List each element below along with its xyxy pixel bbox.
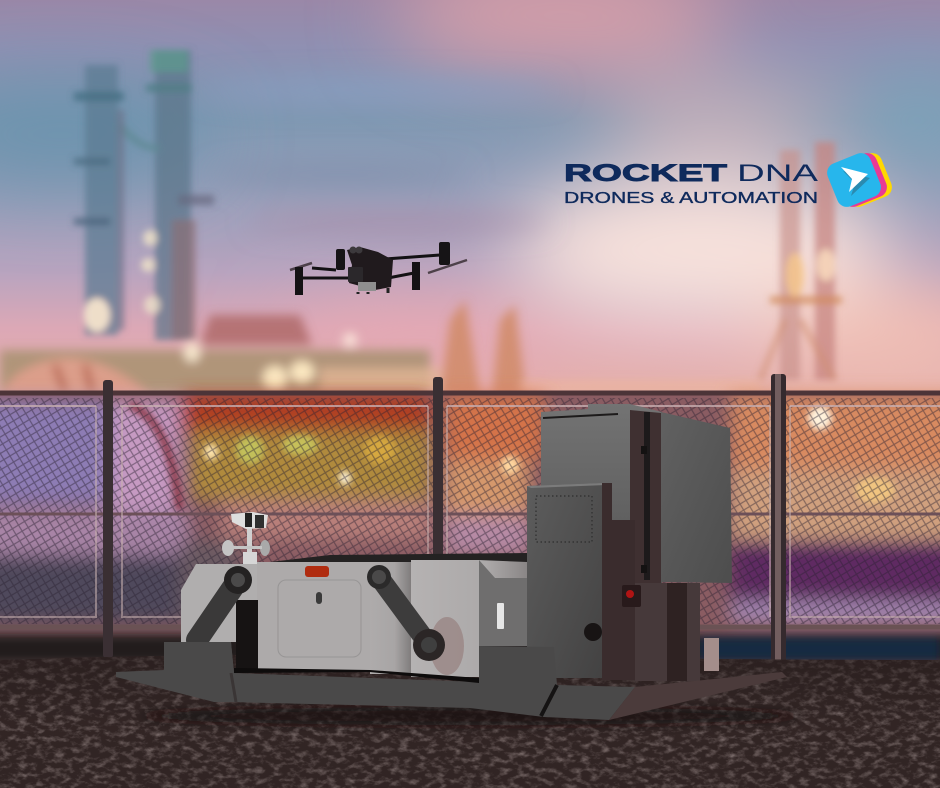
ground: gravel soil — [0, 655, 940, 788]
left front bumper — [164, 642, 234, 673]
logo wordmark — [564, 160, 818, 207]
top deck — [270, 553, 527, 562]
left grey housing — [181, 564, 257, 670]
logo wordmark: DRONES & AUTOMATION — [564, 190, 818, 207]
logo: Rocket DNA — [564, 150, 895, 210]
centre grey housing — [257, 562, 411, 674]
background: blurred sky — [0, 0, 940, 400]
upper tower — [541, 404, 732, 583]
dock shadow — [140, 707, 800, 725]
base sled — [116, 642, 787, 720]
chain-link fence — [0, 374, 940, 662]
drone in flight — [290, 242, 467, 295]
logo wordmark: ROCKET — [564, 160, 728, 187]
drone motors — [295, 262, 420, 295]
right arm — [367, 565, 445, 661]
knob — [584, 623, 602, 641]
logo wordmark: DNA — [737, 160, 818, 187]
background: blurred refinery towers — [74, 50, 842, 380]
background: blurred plant at horizon — [0, 300, 760, 395]
drone body — [347, 247, 393, 290]
background: blurred area behind fence — [0, 395, 940, 664]
lower cabinet — [527, 483, 641, 680]
drone rotors — [290, 260, 467, 273]
left arm — [197, 566, 252, 640]
weather sensor mast — [222, 512, 270, 564]
red indicator — [622, 585, 641, 607]
drone arms — [300, 255, 440, 278]
support column — [635, 583, 719, 681]
logo icon — [824, 150, 895, 210]
drone dock — [116, 404, 800, 725]
right grey housing — [411, 560, 527, 677]
